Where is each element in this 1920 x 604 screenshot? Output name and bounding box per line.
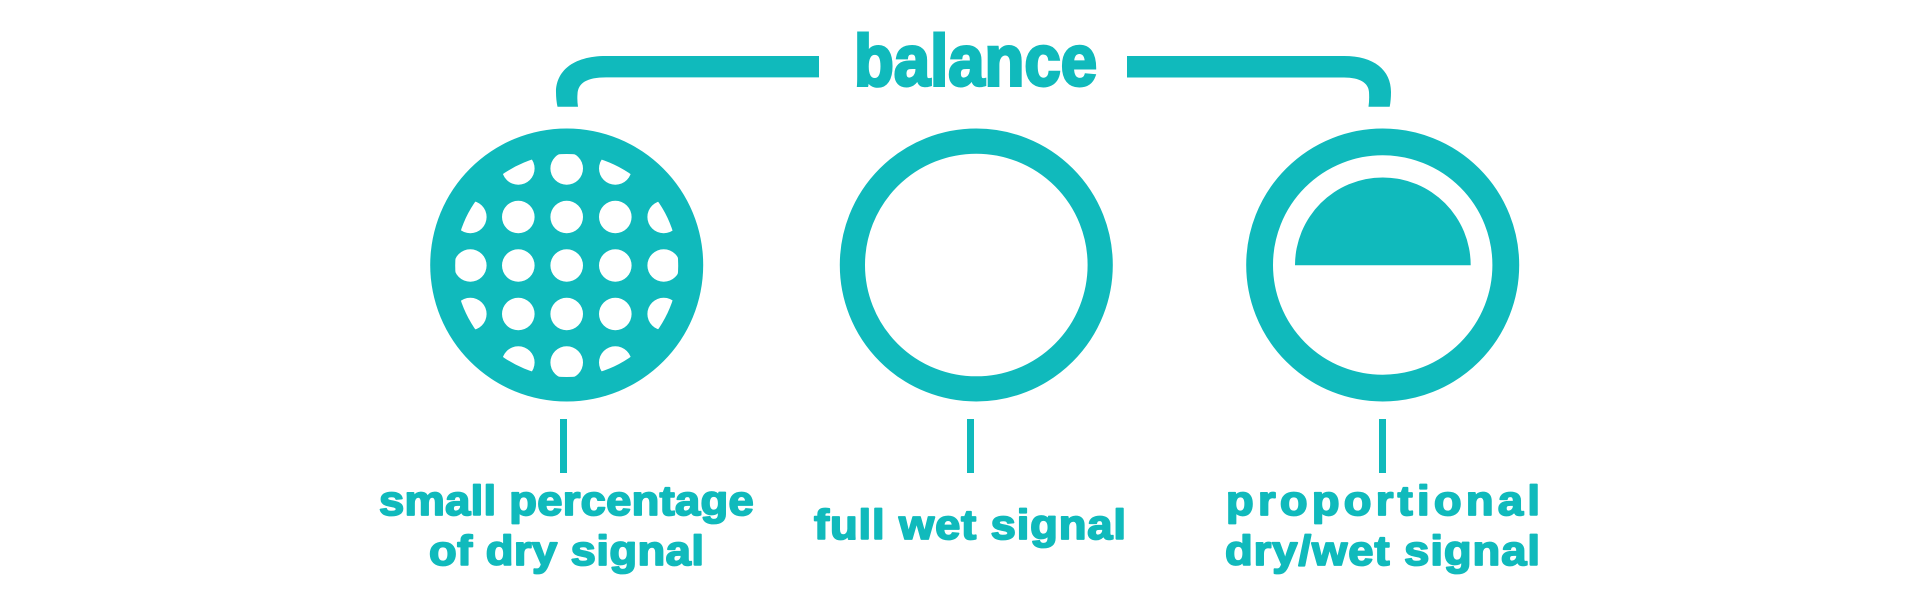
right bracket arm xyxy=(1127,56,1391,107)
left bracket arm xyxy=(556,56,819,107)
label: small percentage of dry signal: of dry signal xyxy=(429,528,704,575)
label: small percentage of dry signal: small percentage xyxy=(379,478,754,525)
label: full wet signal: full wet signal xyxy=(814,502,1126,549)
icon: dotted circle, small percentage of dry signal xyxy=(430,128,703,402)
label: proportional dry/wet signal: dry/wet signal xyxy=(1225,528,1540,575)
label: small percentage of dry signal xyxy=(379,478,754,575)
label: proportional dry/wet signal xyxy=(1225,478,1540,575)
tick: middle xyxy=(967,419,974,473)
tick: left xyxy=(560,419,567,473)
icon: ring with half disc, proportional dry/wet signal xyxy=(1260,142,1506,388)
title: balance xyxy=(854,22,1097,102)
label: proportional dry/wet signal: proportional xyxy=(1226,478,1540,525)
tick: right xyxy=(1379,419,1386,473)
icon: open ring, full wet signal xyxy=(852,141,1100,389)
